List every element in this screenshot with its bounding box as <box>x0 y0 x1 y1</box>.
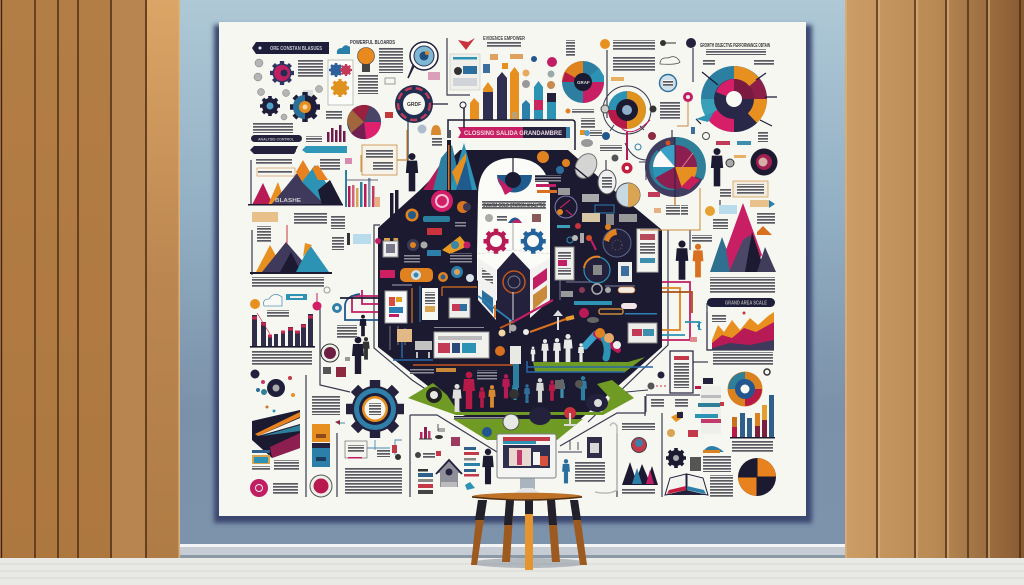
lower left small items <box>415 451 441 458</box>
small tan document and projector <box>397 324 529 358</box>
right wood panels <box>845 0 1024 558</box>
open book in shield <box>478 252 550 325</box>
top cloud icon and dots <box>660 40 680 92</box>
lower right text <box>690 456 731 472</box>
clipboard stack <box>695 378 724 434</box>
main banner title: CLOSSING SALIDA GRANDAMBRE <box>464 130 563 137</box>
people beside right mountain <box>676 235 712 280</box>
small colored text block <box>252 450 299 470</box>
text under left bar chart <box>252 350 312 365</box>
right hexagon tags <box>561 284 657 323</box>
colored lists <box>418 447 480 494</box>
pipe arrow icon <box>690 322 702 342</box>
hexagon orange gauge <box>603 229 631 257</box>
canvas board <box>214 22 812 523</box>
pink badge circle <box>310 475 332 497</box>
pink circle icon <box>250 479 298 497</box>
right pill label <box>707 298 775 307</box>
top left pill header: ORE CONSTAN BLASUES <box>270 46 322 52</box>
hexagon mid right icons <box>557 209 637 251</box>
hexagon middle right document <box>555 247 574 280</box>
left bar chart <box>250 310 315 348</box>
left wood panels <box>0 0 180 558</box>
feather card <box>450 38 480 90</box>
small lower icons <box>667 411 698 437</box>
pie chart upper left <box>347 105 381 139</box>
lower doc and tube <box>587 423 617 493</box>
target magnifier <box>408 42 438 78</box>
connector lines <box>306 38 720 497</box>
right document <box>670 351 693 393</box>
house icon <box>436 460 475 490</box>
small icons top center <box>483 54 557 89</box>
small grey node icons <box>254 59 322 120</box>
left pill labels <box>250 135 347 154</box>
text under lower left mountains <box>252 277 324 287</box>
cloud icon <box>337 45 350 54</box>
chevron stripes <box>478 296 553 333</box>
left pipe icons <box>321 303 357 377</box>
text beside left mountains <box>251 158 352 204</box>
lower people group <box>452 372 587 412</box>
right area chart <box>707 312 774 350</box>
top left pill header <box>252 42 329 54</box>
dark balls on lawn <box>426 387 608 437</box>
central pillar and tag <box>509 346 521 399</box>
top center heading text <box>483 36 525 48</box>
lower left mountain chart <box>250 225 332 275</box>
splash emblem <box>250 370 295 412</box>
shield icons <box>485 214 541 223</box>
small doc panels <box>618 262 657 343</box>
person by monitor <box>482 449 494 484</box>
lower right bar chart <box>730 395 775 438</box>
orange framed text box <box>361 130 407 175</box>
big segmented wheel <box>696 66 777 132</box>
colored pipes left of hexagon <box>340 290 385 320</box>
orange capsule icons <box>380 236 474 282</box>
main banner frame <box>448 120 575 150</box>
left silhouette tower <box>390 190 398 241</box>
blue person and text <box>562 459 605 483</box>
text under area chart <box>713 352 773 365</box>
left column text <box>312 396 340 415</box>
quadrant pie <box>738 458 776 496</box>
shield heading <box>482 201 546 210</box>
icons right of pie <box>716 132 768 158</box>
green ground <box>408 357 645 440</box>
lower gear doc boxes <box>345 441 401 460</box>
right upper stubs <box>705 200 775 229</box>
left cloud row <box>250 287 330 310</box>
concentric ring chart <box>601 86 656 134</box>
small person above hexagon <box>406 153 418 191</box>
open book <box>665 474 708 495</box>
central hexagon <box>378 150 662 440</box>
compass ring badge <box>395 85 433 123</box>
right connector stubs <box>558 440 582 452</box>
donut legend <box>566 40 594 114</box>
pink pin node <box>622 162 632 174</box>
pink badge icon <box>431 190 471 213</box>
top heading: POWERFUL BLOARDS <box>350 40 396 46</box>
lower right donut <box>728 369 770 406</box>
donut chart top <box>562 61 604 103</box>
person beside pie <box>711 148 734 186</box>
top center bar chart <box>470 67 556 120</box>
wide document card <box>449 298 470 318</box>
pink gear <box>265 56 299 90</box>
blue tier line <box>393 340 653 372</box>
ribbon fold banner <box>252 410 300 458</box>
top right heading: GROWTH OBJECTIVE PERFORMANCE OBTAIN <box>700 43 770 49</box>
colored pipes right of hexagon <box>655 282 700 340</box>
top right center text <box>600 39 655 81</box>
semicircle chart in shield <box>497 150 532 195</box>
wooden stool <box>471 493 587 570</box>
right pill label: GRAND AREA SCALE <box>725 300 768 306</box>
dark and pink dots <box>677 38 710 140</box>
top center heading text: EVIDENCE EMPOWER <box>483 36 525 42</box>
top left text block <box>253 60 378 133</box>
text under left mountains <box>252 212 371 250</box>
left mountain chart: BLASHE <box>275 198 301 204</box>
text under right bars <box>732 440 773 452</box>
monitor screen card <box>434 326 489 358</box>
small bar chart <box>327 125 346 142</box>
dark gear <box>256 92 284 120</box>
orange top text box <box>720 181 768 198</box>
left document card <box>385 291 407 323</box>
white people group on upper tier <box>531 334 584 362</box>
orange arrow torch <box>530 310 574 332</box>
lightbulb <box>358 48 374 72</box>
ring connector pink line <box>602 125 656 160</box>
shield gears <box>478 222 551 259</box>
pie lower connectors <box>640 188 700 230</box>
donut chart top: GRAF <box>577 80 590 85</box>
hexagon arc gauge <box>584 257 610 283</box>
big gear emblem <box>334 368 416 450</box>
desktop monitor <box>497 434 556 494</box>
interior lines <box>390 278 635 350</box>
orange stat box <box>312 424 330 442</box>
floor and baseboard <box>0 544 1024 585</box>
book text <box>710 475 733 497</box>
gear side connectors <box>335 420 402 455</box>
connector dots lower right <box>626 372 688 412</box>
small red chart <box>419 424 460 446</box>
large orange gear <box>284 86 326 128</box>
large pie chart <box>625 137 706 197</box>
wheel side texts <box>703 60 774 65</box>
colored vertical bar chart <box>345 170 380 207</box>
satellite dish icons <box>571 150 640 207</box>
right mountain <box>710 203 776 272</box>
colorful ribbon knot <box>585 328 621 358</box>
gears card <box>326 60 354 105</box>
lower gear <box>662 444 690 472</box>
left mountain chart <box>248 160 343 206</box>
lower left text block <box>345 467 402 495</box>
middle document card <box>422 288 438 320</box>
right text stub <box>660 102 680 120</box>
people near pipes <box>352 315 370 374</box>
shield heading: SWARM GOLD STATION ANALYTIC <box>483 203 545 209</box>
blue stat box <box>312 443 330 467</box>
text below right mountain <box>710 277 775 293</box>
hexagon upper left icons <box>375 208 466 257</box>
blue mountains over hexagon <box>423 102 477 192</box>
tier text panels <box>410 368 583 419</box>
compass ring badge: GRDF <box>407 102 421 108</box>
white shield centre <box>477 158 550 318</box>
blue cloud icon <box>703 446 724 453</box>
top right heading <box>700 43 770 55</box>
hexagon top icons <box>535 151 614 222</box>
small connector icons <box>385 72 448 147</box>
small icons near ring <box>580 118 641 151</box>
hexagon right document <box>637 229 658 272</box>
top text block <box>379 47 403 73</box>
main banner title <box>458 127 570 138</box>
mountain balloon chart <box>622 422 658 495</box>
dark circle chart <box>750 148 778 176</box>
left pill labels: ANALYSIS CONTROL <box>258 136 294 142</box>
